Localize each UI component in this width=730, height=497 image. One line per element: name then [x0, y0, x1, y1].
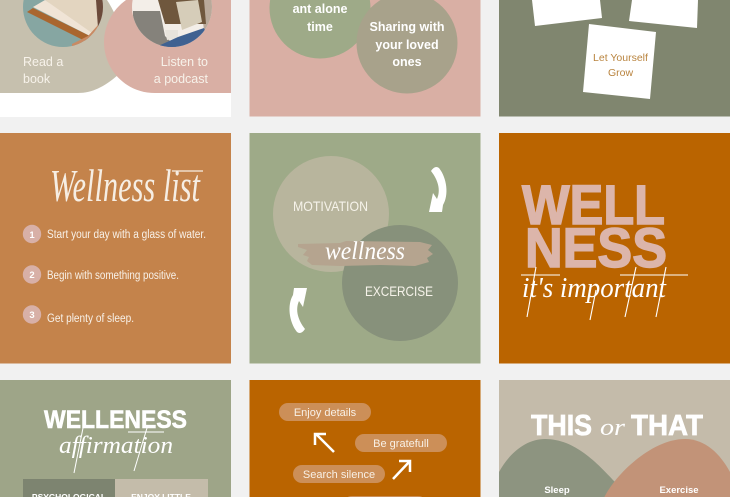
circle: exercise [342, 225, 458, 341]
label: read a book: book [23, 72, 51, 86]
label: motivation: MOTIVATION [293, 198, 368, 214]
list item 1: 1 [29, 230, 35, 241]
circle: motivation [273, 156, 389, 272]
panel: read a book or listen to a podcast [0, 0, 231, 117]
panel: sticky notes [499, 0, 730, 116]
photo: woman with laptop [132, 0, 212, 47]
brush stroke [298, 241, 433, 266]
pill: be gratefull: Be gratefull [373, 438, 429, 450]
label: listen to a podcast: Listen to [161, 55, 208, 69]
pill: search silence [293, 465, 385, 483]
note right [629, 0, 698, 28]
list item 3: Get plenty of sleep. [47, 313, 134, 325]
script: affirmation [59, 428, 173, 473]
panel: wellness it's important [499, 133, 730, 364]
arrow: curved up [290, 288, 307, 333]
text: sharing with your loved ones: Sharing with [370, 20, 444, 34]
pill: enjoy details: Enjoy details [294, 407, 357, 419]
script: it's important: it's important [522, 273, 667, 304]
label: listen to a podcast: a podcast [154, 72, 209, 86]
pill: search silence: Search silence [303, 469, 375, 481]
taupe circle [356, 0, 458, 94]
list item 3 [23, 305, 134, 325]
list item 1: Start your day with a glass of water. [47, 229, 206, 241]
photo: open book [23, 0, 104, 47]
text: ant alone time: ant alone [293, 2, 347, 16]
panel: this or that [499, 380, 730, 497]
panel: welleness affirmation [0, 380, 231, 497]
pill: cropped [348, 496, 422, 497]
panel: pink circles [250, 0, 480, 116]
script title: Wellness list [50, 160, 201, 211]
list item 2: Begin with something positive. [47, 270, 179, 282]
pill: enjoy details [279, 403, 371, 421]
heading: that: THAT [631, 410, 703, 442]
script: it's important [521, 267, 688, 320]
text: sharing with your loved ones: your loved [375, 38, 439, 52]
label: excercise: EXCERCISE [365, 283, 433, 299]
list item 2 [23, 265, 179, 284]
arrow: up right [393, 461, 410, 479]
beige shape [0, 0, 122, 93]
label: sleep: Sleep [544, 485, 570, 496]
note: let yourself grow: Let Yourself [593, 52, 648, 64]
text: ant alone time: time [307, 20, 333, 34]
text: sharing with your loved ones: ones [392, 55, 422, 69]
label: exercise: Exercise [659, 485, 699, 496]
arrow: up left [315, 434, 334, 452]
green circle [270, 0, 370, 58]
note left [532, 0, 602, 26]
heading: ness: NESS [525, 216, 667, 279]
pink shape [104, 0, 231, 93]
label: read a book: Read a [23, 55, 63, 69]
box: psychological [23, 479, 115, 497]
script: affirmation: affirmation [59, 433, 173, 459]
box: enjoy little [115, 479, 208, 497]
heading: this: THIS [531, 410, 592, 442]
note: let yourself grow: Grow [608, 67, 633, 79]
list item 3: 3 [29, 310, 35, 321]
list item 2: 2 [29, 270, 35, 281]
pill: be gratefull [355, 434, 447, 452]
script: wellness: wellness [325, 238, 405, 265]
heading: well: WELL [522, 173, 665, 236]
list item 1 [23, 225, 206, 243]
script: or: or [600, 415, 626, 441]
panel: gratitude pills [250, 380, 480, 497]
panel: wellness list [0, 133, 231, 364]
arrow: curved down [429, 167, 446, 212]
panel: motivation and exercise [250, 133, 480, 364]
heading: welleness: WELLENESS [44, 406, 187, 434]
note: let yourself grow [583, 24, 656, 99]
shape: pink hump [603, 439, 730, 497]
shape: green hump [499, 439, 614, 497]
